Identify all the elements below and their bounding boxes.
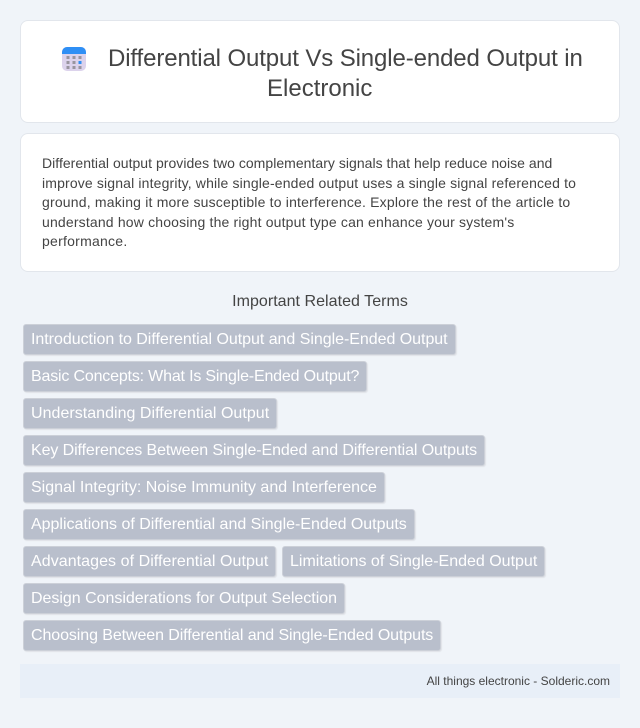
intro paragraph: understand how choosing the right output type can enhance your system's	[42, 214, 514, 230]
title	[108, 45, 583, 102]
intro paragraph	[42, 155, 576, 249]
tag	[23, 398, 277, 429]
footer	[20, 664, 620, 698]
title: Electronic	[267, 75, 372, 102]
tag	[23, 361, 367, 392]
title: Differential Output Vs Single-ended Output in	[108, 45, 583, 72]
tag	[23, 435, 485, 466]
tag	[23, 509, 415, 540]
tag: Key Differences Between Single-Ended and Differential Outputs	[31, 442, 477, 459]
tag: Basic Concepts: What Is Single-Ended Output?	[31, 368, 359, 385]
tag: Advantages of Differential Output	[31, 553, 268, 570]
tag	[23, 472, 385, 503]
intro text panel	[20, 133, 620, 272]
tag: Choosing Between Differential and Single-Ended Outputs	[31, 627, 433, 644]
tag	[23, 583, 345, 614]
footer: All things electronic - Solderic.com	[427, 674, 610, 688]
tag	[23, 324, 456, 355]
intro paragraph: Differential output provides two complementary signals that help reduce noise and	[42, 155, 552, 171]
related terms tags	[23, 324, 546, 652]
tag: Understanding Differential Output	[31, 405, 269, 422]
icon: calendar	[62, 47, 86, 71]
tag	[23, 546, 276, 577]
intro paragraph: improve signal integrity, while single-ended output uses a single signal referenced to	[42, 175, 576, 191]
heading: related terms: Important Related Terms	[232, 293, 408, 310]
tag	[23, 620, 441, 651]
tag: Applications of Differential and Single-Ended Outputs	[31, 516, 407, 533]
tag: Design Considerations for Output Selection	[31, 590, 337, 607]
tag: Signal Integrity: Noise Immunity and Interference	[31, 479, 377, 496]
intro paragraph: performance.	[42, 233, 127, 249]
header panel	[20, 20, 620, 123]
intro paragraph: ground, making it more susceptible to interference. Explore the rest of the article to	[42, 194, 570, 210]
tag: Limitations of Single-Ended Output	[290, 553, 537, 570]
tag	[282, 546, 545, 577]
tag: Introduction to Differential Output and Single-Ended Output	[31, 331, 448, 348]
